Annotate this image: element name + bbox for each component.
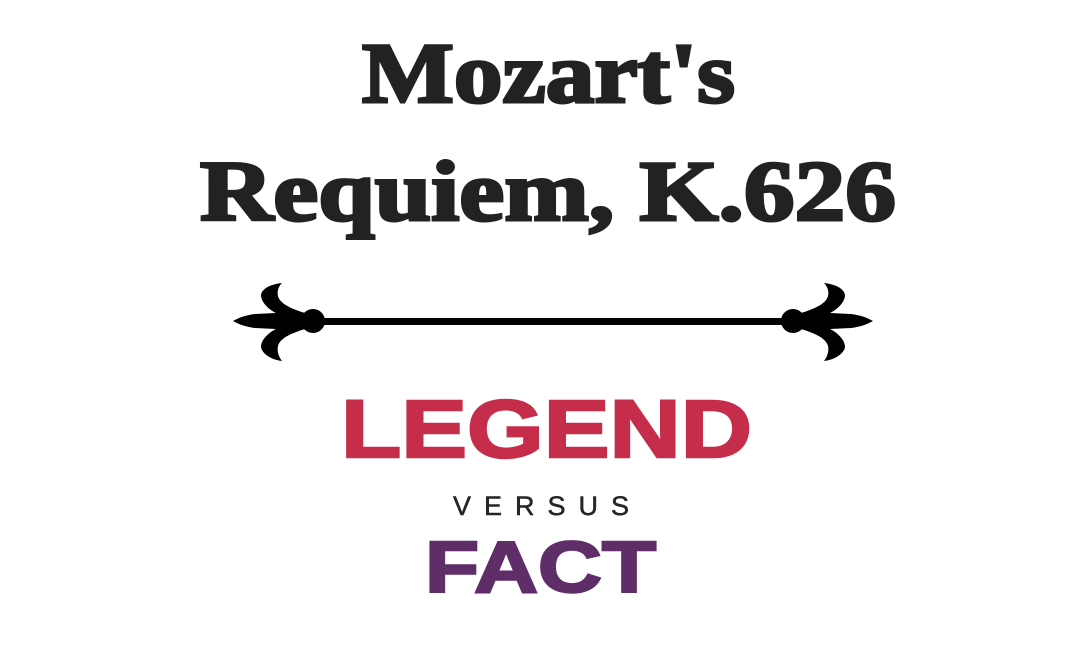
heading: FACT: FACT <box>425 528 656 608</box>
icon: ornamental fleur-de-lis divider <box>233 283 873 361</box>
text: VERSUS: VERSUS <box>453 491 629 521</box>
heading: LEGEND: LEGEND <box>341 384 752 475</box>
title: Requiem, K.626 <box>200 143 896 239</box>
title: Mozart's <box>362 25 735 121</box>
title <box>200 25 896 239</box>
